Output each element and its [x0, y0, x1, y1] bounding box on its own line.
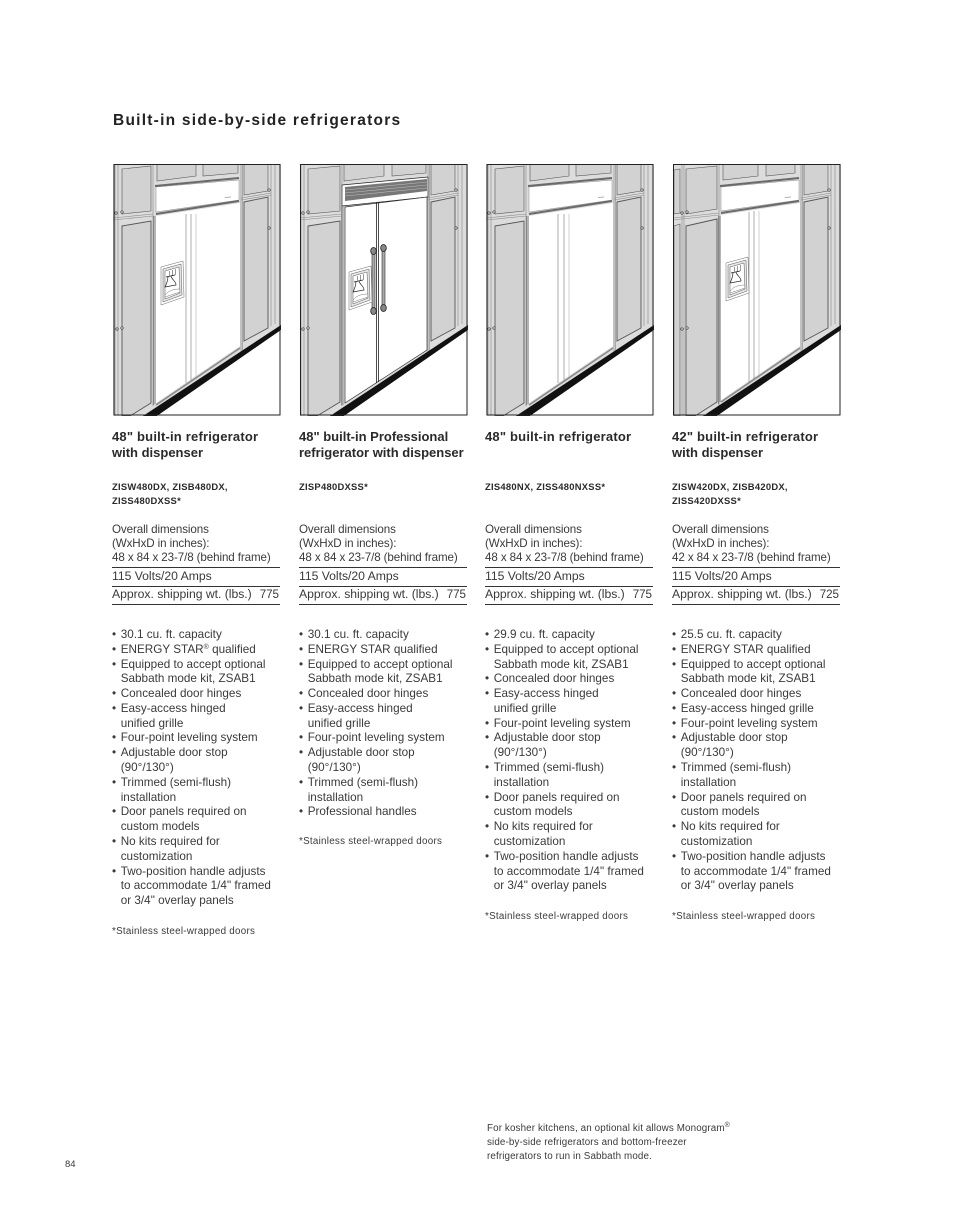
column 1 electrical row — [112, 567, 280, 587]
column 2 features: • — [299, 658, 303, 671]
column 1 features: • — [112, 658, 116, 671]
column 4 features: Two-position handle adjusts — [681, 850, 825, 863]
column 3 features: Adjustable door stop — [494, 731, 601, 744]
column 3 features: • — [485, 628, 489, 641]
column 3 footnote: *Stainless steel-wrapped doors — [485, 911, 628, 922]
column 2 features: • — [299, 702, 303, 715]
column 1 features: or 3/4" overlay panels — [121, 894, 234, 907]
column 2 features: unified grille — [308, 717, 370, 730]
column 3 features: Equipped to accept optional — [494, 643, 638, 656]
column 1 dimensions: 48 x 84 x 23-7/8 (behind frame) — [112, 551, 271, 564]
column 2 features: • — [299, 805, 303, 818]
column 2 heading: refrigerator with dispenser — [299, 445, 464, 460]
column 1 features: custom models — [121, 820, 200, 833]
column 4 features: No kits required for — [681, 820, 780, 833]
column 1 shipping weight row — [112, 586, 280, 605]
column 4 features: • — [672, 820, 676, 833]
column 2 electrical row — [299, 567, 467, 587]
column 3 features: • — [485, 643, 489, 656]
column 1 features: • — [112, 687, 116, 700]
column 4 model numbers — [672, 481, 788, 506]
column 3 electrical row: 115 Volts/20 Amps — [485, 569, 585, 583]
illustration: 48 inch refrigerator with dispenser — [113, 164, 281, 416]
column 3 features: • — [485, 687, 489, 700]
column 4 features: (90°/130°) — [681, 746, 734, 759]
column 4 shipping weight row: 725 — [820, 588, 839, 601]
column 4 features: Sabbath mode kit, ZSAB1 — [681, 672, 816, 685]
column 3 features: • — [485, 820, 489, 833]
column 4 features: • — [672, 702, 676, 715]
column 2 electrical row: 115 Volts/20 Amps — [299, 569, 399, 583]
title: Built-in side-by-side refrigerators — [113, 112, 401, 128]
column 2 features — [299, 628, 452, 818]
column 4 heading: 42" built-in refrigerator — [672, 429, 818, 444]
column 1 features: • — [112, 628, 116, 641]
column 1 dimensions: (WxHxD in inches): — [112, 537, 209, 550]
column 1 heading — [112, 429, 258, 460]
column 3 dimensions: Overall dimensions — [485, 522, 582, 536]
column 3 shipping weight row: Approx. shipping wt. (lbs.) — [485, 587, 625, 601]
column 3 features: customization — [494, 835, 565, 848]
column 3 heading: 48" built-in refrigerator — [485, 429, 631, 444]
column 1 features: 30.1 cu. ft. capacity — [121, 628, 222, 641]
column 2 shipping weight row: 775 — [447, 588, 466, 601]
column 2 features: • — [299, 643, 303, 656]
column 2 features: Equipped to accept optional — [308, 658, 452, 671]
column 3 features: Two-position handle adjusts — [494, 850, 638, 863]
column 4 footnote: *Stainless steel-wrapped doors — [672, 911, 815, 922]
column 4 features: • — [672, 850, 676, 863]
column 1 heading: 48" built-in refrigerator — [112, 429, 258, 444]
column 2 model numbers: ZISP480DXSS* — [299, 481, 368, 492]
column 4 features: • — [672, 791, 676, 804]
column 3 features: Four-point leveling system — [494, 717, 631, 730]
column 4 heading — [672, 429, 818, 460]
column 3 features — [485, 628, 644, 892]
column 4 features: Equipped to accept optional — [681, 658, 825, 671]
column 4 features — [672, 628, 831, 892]
column 3 features: to accommodate 1/4" framed — [494, 864, 644, 878]
column 2 features: Trimmed (semi-flush) — [308, 776, 418, 789]
column 2 features: • — [299, 731, 303, 744]
column 3 features: • — [485, 717, 489, 730]
column 1 features: Sabbath mode kit, ZSAB1 — [121, 672, 256, 685]
column 1 features: • — [112, 835, 116, 848]
column 3 dimensions — [485, 522, 644, 564]
column 4 shipping weight row: Approx. shipping wt. (lbs.) — [672, 587, 812, 601]
column 2 dimensions: Overall dimensions — [299, 522, 396, 536]
column 4 features: • — [672, 731, 676, 744]
column 3 features: • — [485, 731, 489, 744]
column 4 dimensions: Overall dimensions — [672, 522, 769, 536]
kosher note: side-by-side refrigerators and bottom-freezer — [487, 1137, 687, 1148]
column 4 features: Adjustable door stop — [681, 731, 788, 744]
column 2 features: • — [299, 628, 303, 641]
illustration: 48 inch Professional refrigerator with dispenser — [300, 164, 468, 416]
column 4 features: customization — [681, 835, 752, 848]
column 2 heading: 48" built-in Professional — [299, 429, 448, 444]
column 2 features: Four-point leveling system — [308, 731, 445, 744]
column 4 features: Easy-access hinged grille — [681, 702, 814, 715]
column 3 features: Easy-access hinged — [494, 687, 599, 700]
column 1 features: • — [112, 805, 116, 818]
column 4 features: to accommodate 1/4" framed — [681, 864, 831, 878]
column 1 features — [112, 628, 271, 907]
column 4 features: • — [672, 761, 676, 774]
column 3 features: unified grille — [494, 702, 556, 715]
column 3 shipping weight row — [485, 586, 653, 605]
column 1 features: • — [112, 702, 116, 715]
column 3 features: Sabbath mode kit, ZSAB1 — [494, 658, 629, 671]
page number: 84 — [65, 1158, 76, 1170]
column 2 shipping weight row — [299, 586, 467, 605]
column 3 features: Concealed door hinges — [494, 672, 614, 685]
column 3 features: Trimmed (semi-flush) — [494, 761, 604, 774]
column 1 heading: with dispenser — [112, 445, 203, 460]
column 3 dimensions: (WxHxD in inches): — [485, 537, 582, 550]
column 2 features: Professional handles — [308, 805, 417, 818]
column 1 features: No kits required for — [121, 835, 220, 848]
column 4 heading: with dispenser — [672, 445, 763, 460]
column 2 shipping weight row: Approx. shipping wt. (lbs.) — [299, 587, 439, 601]
column 1 footnote: *Stainless steel-wrapped doors — [112, 926, 255, 937]
kosher note — [487, 1122, 730, 1162]
column 1 features: Adjustable door stop — [121, 746, 228, 759]
column 1 features: (90°/130°) — [121, 761, 174, 774]
column 1 features: Trimmed (semi-flush) — [121, 776, 231, 789]
column 2 features: ENERGY STAR qualified — [308, 643, 438, 656]
column 4 features: Four-point leveling system — [681, 717, 818, 730]
column 1 model numbers — [112, 481, 228, 506]
kosher note: refrigerators to run in Sabbath mode. — [487, 1151, 652, 1162]
column 4 electrical row: 115 Volts/20 Amps — [672, 569, 772, 583]
column 1 features: • — [112, 864, 116, 878]
column 2 dimensions: (WxHxD in inches): — [299, 537, 396, 550]
column 4 features: Concealed door hinges — [681, 687, 801, 700]
column 1 features: Four-point leveling system — [121, 731, 258, 744]
column 4 features: Door panels required on — [681, 791, 807, 804]
column 4 dimensions: (WxHxD in inches): — [672, 537, 769, 550]
column 1 dimensions — [112, 522, 271, 564]
column 4 model numbers: ZISS420DXSS* — [672, 495, 741, 506]
column 3 features: or 3/4" overlay panels — [494, 879, 607, 892]
column 2 features: Adjustable door stop — [308, 746, 415, 759]
column 4 features: • — [672, 658, 676, 671]
column 2 dimensions — [299, 522, 458, 564]
column 2 features: • — [299, 746, 303, 759]
column 2 features: Sabbath mode kit, ZSAB1 — [308, 672, 443, 685]
column 1 features: Easy-access hinged — [121, 702, 226, 715]
column 1 features: ENERGY STAR® qualified — [121, 643, 256, 656]
column 3 features: • — [485, 791, 489, 804]
column 3 dimensions: 48 x 84 x 23-7/8 (behind frame) — [485, 551, 644, 564]
column 1 features: installation — [121, 791, 176, 804]
column 3 model numbers: ZIS480NX, ZISS480NXSS* — [485, 481, 605, 492]
column 4 dimensions — [672, 522, 831, 564]
column 1 shipping weight row: Approx. shipping wt. (lbs.) — [112, 587, 252, 601]
column 1 features: • — [112, 746, 116, 759]
column 4 features: custom models — [681, 805, 760, 818]
column 2 features: Concealed door hinges — [308, 687, 428, 700]
column 3 features: • — [485, 850, 489, 863]
column 4 features: ENERGY STAR qualified — [681, 643, 811, 656]
column 2 dimensions: 48 x 84 x 23-7/8 (behind frame) — [299, 551, 458, 564]
column 1 dimensions: Overall dimensions — [112, 522, 209, 536]
column 4 features: • — [672, 687, 676, 700]
column 3 features: installation — [494, 776, 549, 789]
column 3 features: • — [485, 672, 489, 685]
column 2 features: (90°/130°) — [308, 761, 361, 774]
column 3 features: 29.9 cu. ft. capacity — [494, 628, 595, 641]
column 4 features: • — [672, 717, 676, 730]
column 1 features: to accommodate 1/4" framed — [121, 879, 271, 892]
illustration: 42 inch refrigerator with dispenser — [673, 164, 841, 416]
column 4 electrical row — [672, 567, 840, 587]
column 4 model numbers: ZISW420DX, ZISB420DX, — [672, 481, 788, 492]
column 2 features: installation — [308, 791, 363, 804]
column 4 features: or 3/4" overlay panels — [681, 879, 794, 892]
column 1 features: • — [112, 643, 116, 656]
column 1 shipping weight row: 775 — [260, 588, 279, 601]
column 4 features: • — [672, 643, 676, 656]
column 3 features: custom models — [494, 805, 573, 818]
column 2 footnote: *Stainless steel-wrapped doors — [299, 836, 442, 847]
column 1 features: Equipped to accept optional — [121, 658, 265, 671]
kosher note: For kosher kitchens, an optional kit allows Monogram® — [487, 1122, 730, 1134]
column 1 features: • — [112, 776, 116, 789]
column 1 features: • — [112, 731, 116, 744]
column 3 features: (90°/130°) — [494, 746, 547, 759]
column 4 features: Trimmed (semi-flush) — [681, 761, 791, 774]
column 3 features: Door panels required on — [494, 791, 620, 804]
column 1 features: Two-position handle adjusts — [121, 864, 265, 878]
column 2 features: • — [299, 687, 303, 700]
column 4 dimensions: 42 x 84 x 23-7/8 (behind frame) — [672, 551, 831, 564]
column 2 features: 30.1 cu. ft. capacity — [308, 628, 409, 641]
column 1 model numbers: ZISS480DXSS* — [112, 495, 181, 506]
column 4 features: 25.5 cu. ft. capacity — [681, 628, 782, 641]
column 1 electrical row: 115 Volts/20 Amps — [112, 569, 212, 583]
column 1 features: unified grille — [121, 717, 183, 730]
column 4 shipping weight row — [672, 586, 840, 605]
column 3 features: • — [485, 761, 489, 774]
column 3 features: No kits required for — [494, 820, 593, 833]
illustration: 48 inch refrigerator — [486, 164, 654, 416]
column 3 electrical row — [485, 567, 653, 587]
column 1 model numbers: ZISW480DX, ZISB480DX, — [112, 481, 228, 492]
column 2 features: • — [299, 776, 303, 789]
column 3 shipping weight row: 775 — [633, 588, 652, 601]
column 4 features: • — [672, 628, 676, 641]
column 1 features: customization — [121, 850, 192, 863]
column 1 features: Concealed door hinges — [121, 687, 241, 700]
column 1 features: Door panels required on — [121, 805, 247, 818]
column 2 features: Easy-access hinged — [308, 702, 413, 715]
column 2 heading — [299, 429, 464, 460]
column 4 features: installation — [681, 776, 736, 789]
